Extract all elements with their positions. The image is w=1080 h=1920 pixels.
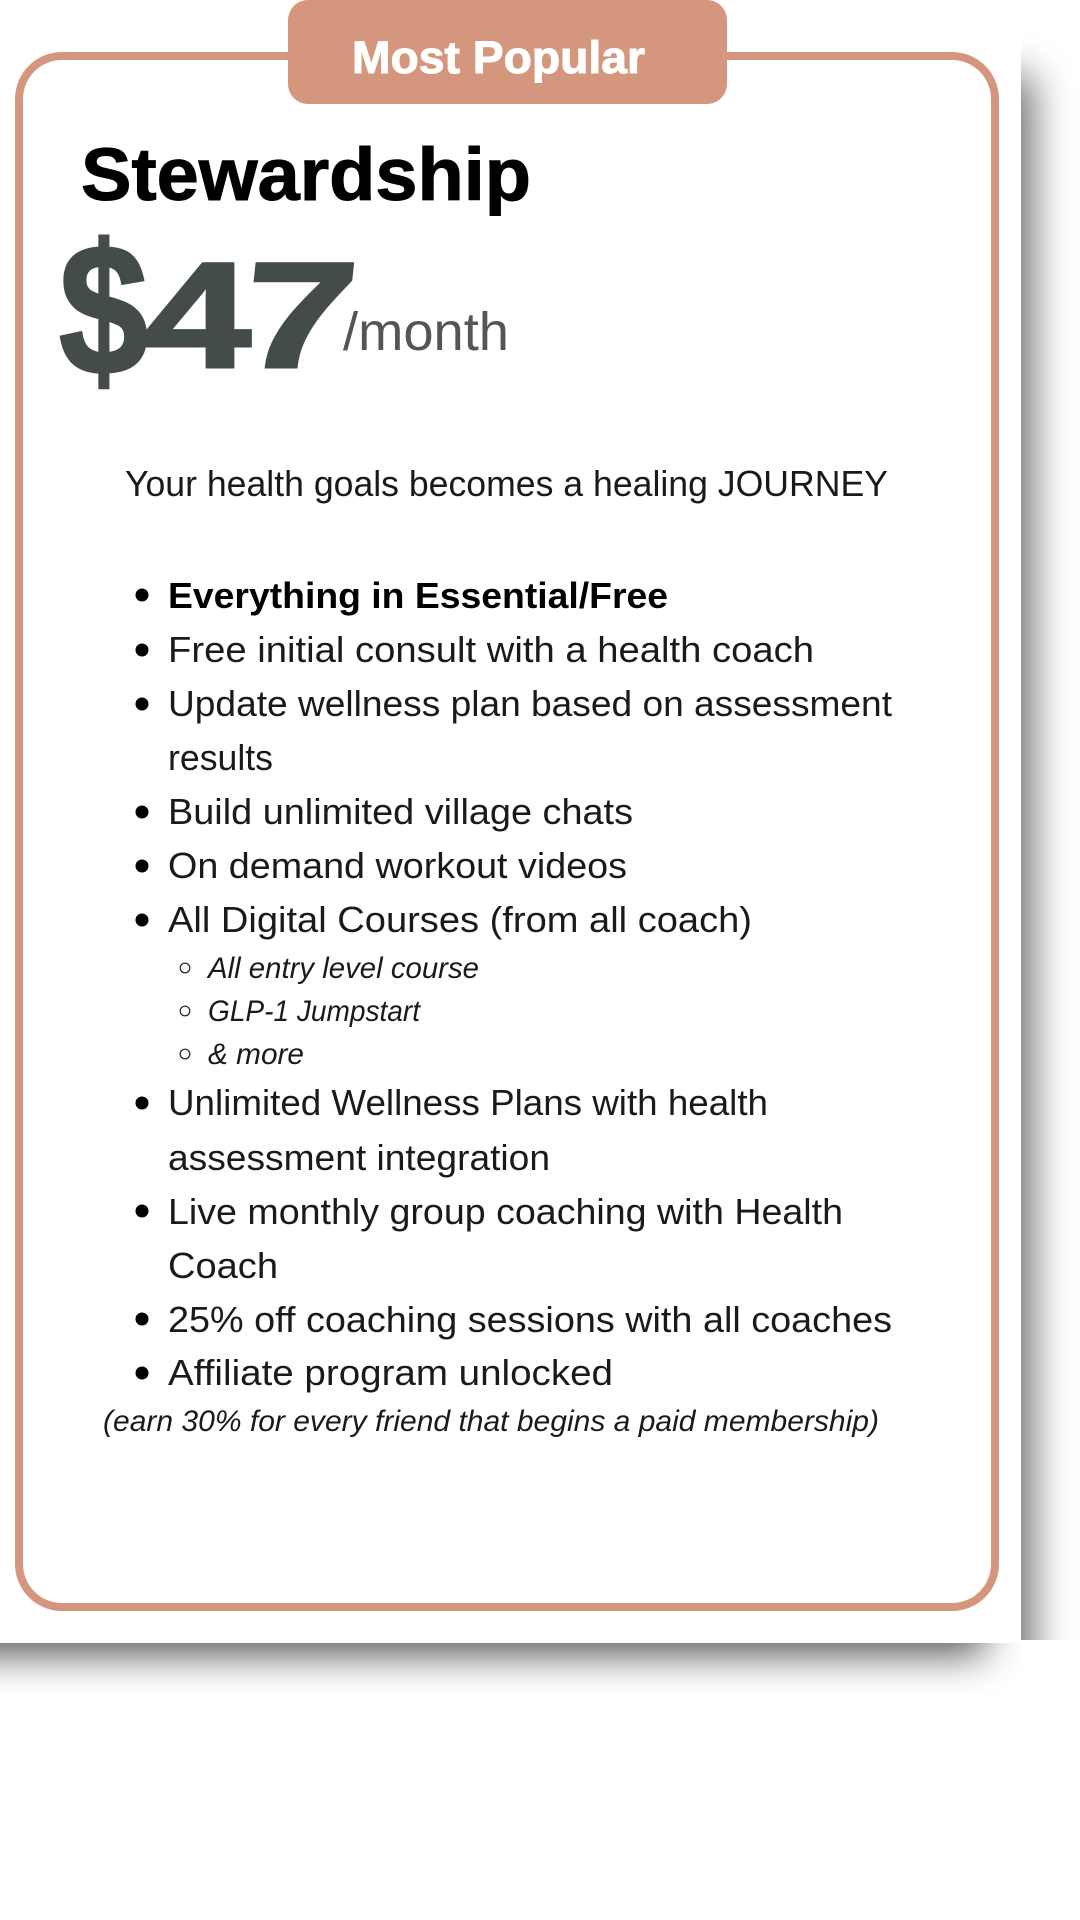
price period: /month <box>343 302 509 362</box>
plan title: Stewardship <box>81 133 531 216</box>
item: group coaching <box>136 1191 843 1286</box>
item: group coaching: Live monthly group coaching with Health <box>168 1191 843 1232</box>
item: digital courses: All Digital Courses (from all coach) <box>168 899 752 940</box>
price: $ <box>59 207 148 414</box>
item: wellness plans <box>136 1082 768 1178</box>
sub-item: more: & more <box>208 1038 304 1071</box>
tagline: Your health goals becomes a healing JOURNEY <box>125 463 888 504</box>
bottom sheet shadow <box>0 1643 1013 1686</box>
sub-item: glp-1: GLP-1 Jumpstart <box>208 995 422 1028</box>
item: update wellness plan: results <box>168 737 273 778</box>
badge: most popular <box>288 0 727 104</box>
item: village chats: Build unlimited village chats <box>168 791 633 832</box>
affiliate note: (earn 30% for every friend that begins a paid membership) <box>103 1405 879 1438</box>
item: update wellness plan <box>136 683 892 778</box>
item: wellness plans: Unlimited Wellness Plans with health <box>168 1082 768 1123</box>
price: 7 <box>235 231 364 399</box>
item: everything in essential: Everything in Essential/Free <box>168 575 668 616</box>
item: affiliate program: Affiliate program unlocked <box>168 1352 613 1393</box>
item: wellness plans: assessment integration <box>168 1137 550 1178</box>
price <box>59 207 364 414</box>
item: free consult: Free initial consult with a health coach <box>168 629 814 670</box>
item: group coaching: Coach <box>168 1245 278 1286</box>
item: update wellness plan: Update wellness plan based on assessment <box>168 683 892 724</box>
badge: most popular: Most Popular <box>352 32 645 83</box>
item: coaching discount: 25% off coaching sessions with all coaches <box>168 1299 892 1340</box>
sub-item: entry level: All entry level course <box>206 952 479 985</box>
item: workout videos: On demand workout videos <box>168 845 627 886</box>
right sheet shadow <box>1021 48 1062 1640</box>
price: 4 <box>145 231 251 399</box>
feature list <box>136 575 892 1393</box>
card outline <box>19 56 995 1607</box>
